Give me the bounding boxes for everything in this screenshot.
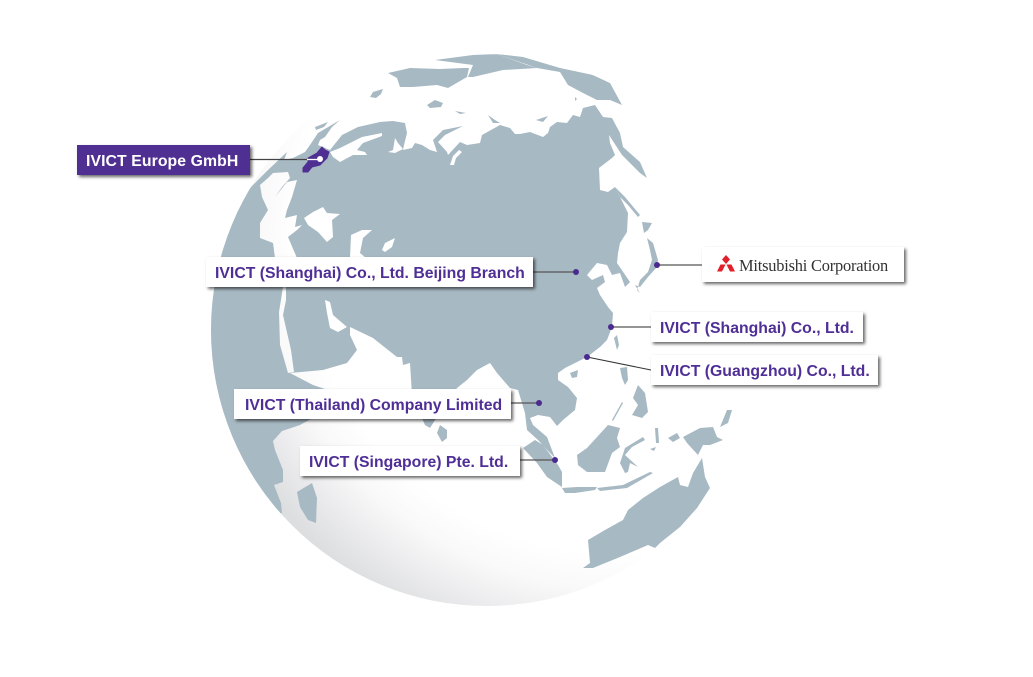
label: IVICT Europe GmbH: IVICT Europe GmbH bbox=[86, 153, 238, 170]
label: IVICT (Singapore) bbox=[300, 446, 520, 476]
label: IVICT (Shanghai) bbox=[651, 312, 863, 342]
label: Beijing Branch bbox=[206, 257, 533, 287]
label: IVICT (Thailand) bbox=[234, 389, 511, 419]
label: Mitsubishi Corporation bbox=[702, 247, 904, 282]
land: Eurasia and Africa bbox=[190, 105, 647, 530]
connector: Mitsubishi bbox=[654, 262, 702, 268]
label: IVICT (Thailand): IVICT (Thailand) Company Limited bbox=[245, 397, 502, 414]
infographic: IVICT global network bbox=[76, 54, 908, 606]
land: Sumatra bbox=[523, 440, 562, 487]
land: Hainan bbox=[570, 370, 578, 378]
connector: Shanghai bbox=[608, 324, 651, 330]
land: Japan bbox=[615, 187, 658, 293]
land: Borneo bbox=[577, 425, 620, 472]
land: Sulawesi bbox=[620, 437, 645, 473]
connector: Europe bbox=[250, 156, 323, 162]
label: IVICT (Shanghai): IVICT (Shanghai) Co., Ltd. bbox=[660, 320, 854, 337]
land: Australia bbox=[583, 458, 710, 568]
label: IVICT (Singapore): IVICT (Singapore) Pte. Ltd. bbox=[309, 454, 508, 471]
land: New Guinea and nearby islands bbox=[650, 410, 732, 455]
label: Mitsubishi Corporation: Mitsubishi Corporation bbox=[739, 256, 888, 275]
land: Norway strip bbox=[310, 120, 340, 145]
label: IVICT (Guangzhou) bbox=[651, 355, 878, 385]
connector: Beijing bbox=[533, 269, 579, 275]
land: Sri Lanka bbox=[437, 425, 447, 442]
label: IVICT Europe GmbH bbox=[77, 145, 250, 175]
land: Greenland bbox=[388, 68, 469, 88]
connector: Singapore bbox=[520, 457, 558, 463]
land: arctic islands bbox=[370, 89, 577, 123]
globe sphere bbox=[211, 54, 763, 606]
label: IVICT (Guangzhou): IVICT (Guangzhou) Co., Ltd. bbox=[660, 363, 870, 380]
land: Java and Sunda islands bbox=[562, 472, 653, 493]
globe map with connectors bbox=[211, 54, 732, 606]
highlighted region: Germany bbox=[303, 147, 329, 172]
land: Taiwan bbox=[614, 335, 619, 350]
land: Arctic archipelago bbox=[435, 54, 537, 77]
connector: Thailand bbox=[511, 400, 542, 406]
land: Madagascar bbox=[297, 483, 317, 523]
land masses bbox=[190, 54, 732, 568]
label: Beijing Branch: IVICT (Shanghai) Co., Ltd. Beijing Branch bbox=[215, 265, 525, 282]
connector: Guangzhou bbox=[584, 354, 651, 370]
land: northern band bbox=[497, 54, 622, 105]
land: Philippines bbox=[612, 367, 648, 421]
icon: Mitsubishi diamonds bbox=[717, 255, 735, 272]
